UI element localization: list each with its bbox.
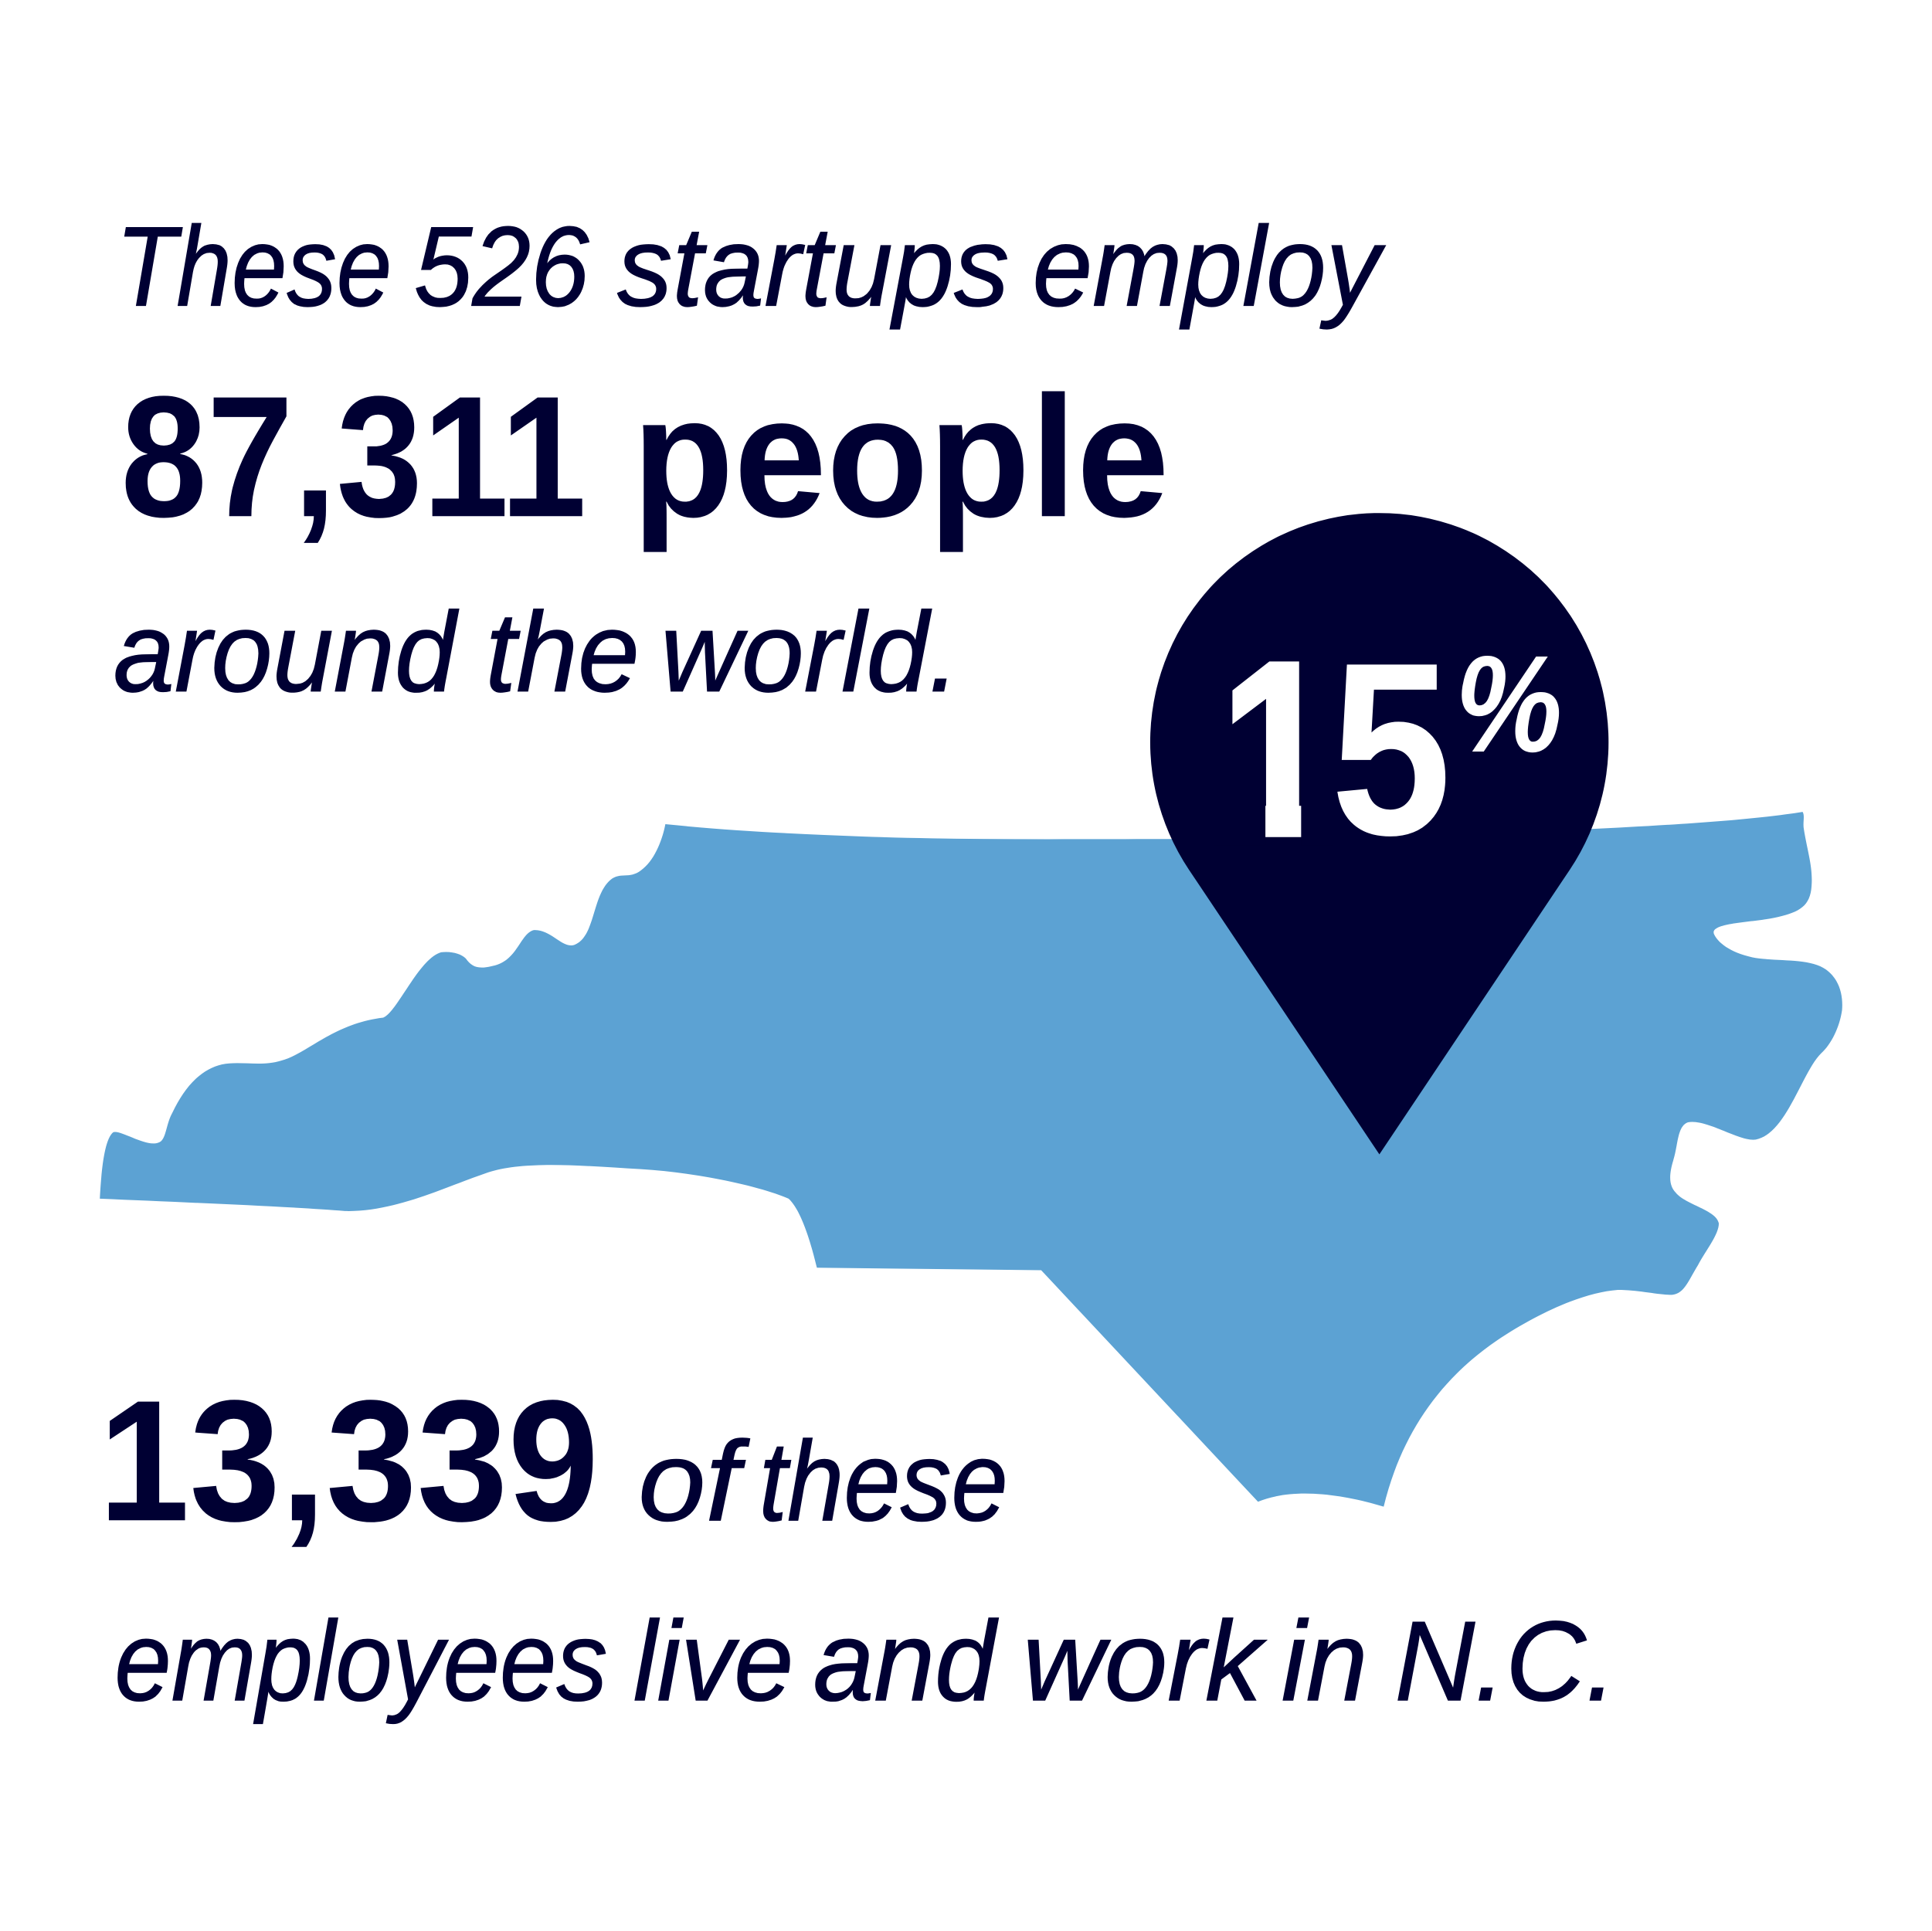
headline: These 526 startups employ: 526 bbox=[414, 204, 589, 331]
text: around the world.: world. bbox=[660, 589, 960, 716]
stat: 13,339: 13,339 bbox=[99, 1365, 599, 1557]
text: of these: of bbox=[638, 1418, 750, 1545]
headline: These 526 startups employ: startups bbox=[617, 204, 1009, 331]
stat: 87,311 people: people bbox=[632, 361, 1170, 553]
map: North Carolina bbox=[100, 812, 1842, 1507]
text: employees live and work in N.C.: in bbox=[1282, 1598, 1367, 1725]
map pin with 15% bbox=[1150, 513, 1608, 1155]
text: employees live and work in N.C. bbox=[114, 1598, 1617, 1725]
text: around the world.: around bbox=[114, 589, 459, 716]
text: around the world. bbox=[114, 589, 960, 716]
stat: 87,311 people bbox=[121, 361, 1170, 553]
text: employees live and work in N.C.: and bbox=[813, 1598, 999, 1725]
map pin with 15%: 1 bbox=[1221, 611, 1334, 887]
map pin with 15%: % bbox=[1455, 626, 1562, 781]
stat: 87,311 people: 87,311 bbox=[121, 361, 586, 553]
text: employees live and work in N.C.: live bbox=[633, 1598, 793, 1725]
text: employees live and work in N.C.: N.C. bbox=[1395, 1598, 1617, 1725]
text: employees live and work in N.C.: work bbox=[1023, 1598, 1267, 1725]
text: employees live and work in N.C.: employees bbox=[114, 1598, 607, 1725]
headline: These 526 startups employ: employ bbox=[1033, 204, 1386, 331]
headline: These 526 startups employ: These bbox=[116, 204, 392, 331]
text: of these: these bbox=[759, 1418, 1008, 1545]
headline: These 526 startups employ bbox=[116, 204, 1386, 331]
text: of these bbox=[638, 1418, 1008, 1545]
map pin with 15%: 5 bbox=[1331, 611, 1452, 887]
text: around the world.: the bbox=[485, 589, 640, 716]
